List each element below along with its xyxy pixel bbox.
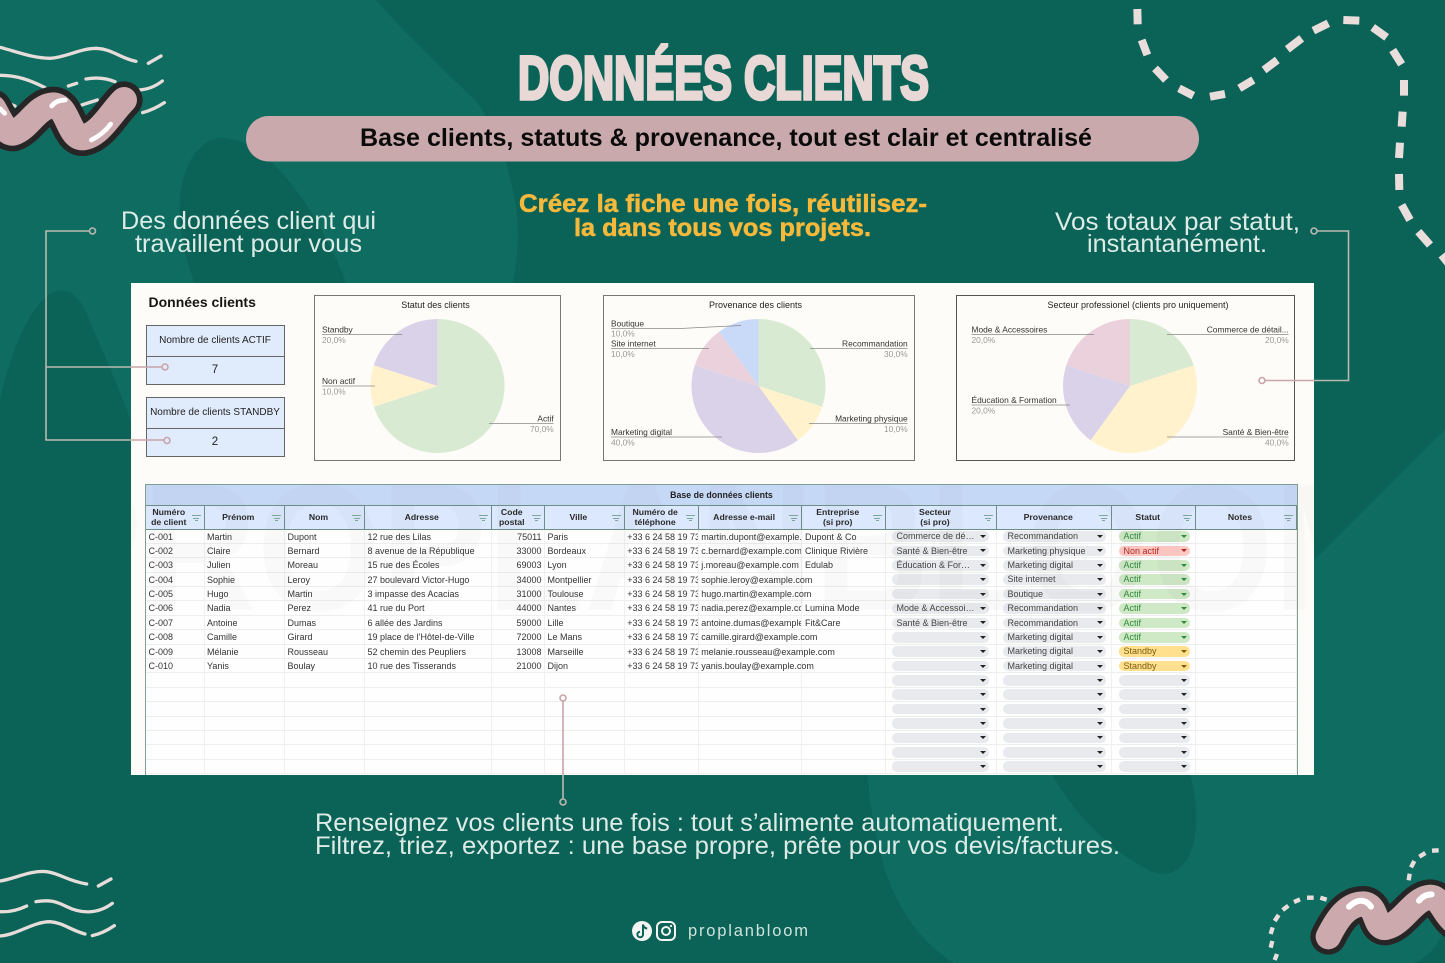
table rows: sophie.leroy@example.com bbox=[701, 575, 812, 585]
table rows: 6 allée des Jardins bbox=[368, 618, 443, 628]
chart: provenance des clients: Boutique bbox=[611, 318, 644, 328]
table rows: 3 impasse des Acacias bbox=[368, 589, 459, 599]
table rows: Marseille bbox=[548, 647, 584, 657]
table header: Secteur bbox=[919, 507, 951, 517]
table rows: Commerce de dé… bbox=[896, 531, 975, 541]
table rows: Bordeaux bbox=[548, 546, 586, 556]
table rows: Marketing digital bbox=[1007, 646, 1073, 656]
table rows: yanis.boulay@example.com bbox=[701, 661, 814, 671]
subtitle banner: Base clients, statuts & provenance, tout est clair et centralisé bbox=[360, 124, 1092, 152]
chart: provenance des clients: 10,0% bbox=[884, 424, 908, 434]
table rows: 12 rue des Lilas bbox=[368, 532, 431, 542]
table header: Code bbox=[501, 507, 523, 517]
table rows: 75011 bbox=[517, 532, 542, 542]
table rows: Martin bbox=[288, 589, 313, 599]
table rows bbox=[146, 530, 1297, 774]
chart: provenance des clients: 10,0% bbox=[611, 349, 635, 359]
table rows: +33 6 24 58 19 73 bbox=[627, 661, 699, 671]
icon: tiktok bbox=[632, 921, 652, 941]
table header: Adresse bbox=[405, 512, 439, 522]
table rows: 8 avenue de la République bbox=[368, 546, 475, 556]
table rows: Marketing digital bbox=[1007, 560, 1073, 570]
table header: Nom bbox=[309, 512, 328, 522]
card: clients actifs bbox=[146, 325, 284, 384]
table header: Entreprise bbox=[816, 507, 859, 517]
chart: secteur professionnel: Commerce de détail... bbox=[1207, 324, 1289, 334]
chart: secteur professionnel: Éducation & Formation bbox=[972, 395, 1057, 405]
table rows: Claire bbox=[207, 546, 231, 556]
table rows: Non actif bbox=[1123, 546, 1159, 556]
table header: Statut bbox=[1135, 512, 1160, 522]
chart: statut des clients: 70,0% bbox=[530, 424, 554, 434]
table header: Numéro de bbox=[632, 507, 678, 517]
chart: secteur professionnel: 40,0% bbox=[1265, 438, 1289, 448]
yellow headline: Créez la fiche une fois, réutilisez- bbox=[519, 190, 927, 218]
table rows: C-004 bbox=[148, 575, 173, 585]
table rows: C-007 bbox=[148, 618, 173, 628]
table rows: 34000 bbox=[516, 575, 542, 585]
table rows: 72000 bbox=[516, 632, 542, 642]
table header: (si pro) bbox=[920, 517, 950, 527]
table rows: Antoine bbox=[207, 618, 238, 628]
table header: (si pro) bbox=[823, 517, 852, 527]
table rows: +33 6 24 58 19 73 bbox=[627, 603, 699, 613]
icon: instagram bbox=[657, 922, 675, 940]
yellow headline: la dans tous vos projets. bbox=[574, 214, 871, 242]
table rows: Dumas bbox=[288, 618, 316, 628]
table rows: Lumina Mode bbox=[805, 603, 860, 613]
table header: de client bbox=[151, 517, 186, 527]
table rows: +33 6 24 58 19 73 bbox=[627, 632, 699, 642]
table rows: Le Mans bbox=[548, 632, 582, 642]
chart: secteur professionnel: Mode & Accessoires bbox=[972, 324, 1047, 334]
table rows: Yanis bbox=[207, 661, 229, 671]
chart: provenance des clients: Marketing physique bbox=[835, 414, 908, 424]
table rows: Nadia bbox=[207, 603, 231, 613]
title: DONNÉES CLIENTS bbox=[518, 44, 929, 112]
table rows: +33 6 24 58 19 73 bbox=[627, 575, 699, 585]
table rows: 31000 bbox=[516, 589, 542, 599]
table rows: Actif bbox=[1123, 632, 1141, 642]
table rows: Mode & Accessoi… bbox=[896, 603, 975, 613]
callout: client data: Des données client qui bbox=[121, 207, 376, 235]
table rows: Santé & Bien-être bbox=[896, 618, 968, 628]
table rows: Recommandation bbox=[1007, 618, 1078, 628]
table rows: Lyon bbox=[548, 560, 567, 570]
table rows: 52 chemin des Peupliers bbox=[368, 647, 466, 657]
table rows: 44000 bbox=[516, 603, 542, 613]
table header: Provenance bbox=[1024, 512, 1073, 522]
table rows: Actif bbox=[1123, 603, 1141, 613]
table rows: C-003 bbox=[148, 560, 173, 570]
table rows: 15 rue des Écoles bbox=[368, 560, 440, 570]
panel: spreadsheet bbox=[131, 283, 1314, 775]
chart: secteur professionnel: 20,0% bbox=[972, 335, 996, 345]
table rows: C-006 bbox=[148, 603, 173, 613]
chart: statut des clients: 20,0% bbox=[322, 335, 346, 345]
table rows: Toulouse bbox=[548, 589, 584, 599]
table rows: Camille bbox=[207, 632, 237, 642]
chart: statut des clients: Actif bbox=[537, 414, 554, 424]
table rows: Marketing digital bbox=[1007, 661, 1073, 671]
chart: provenance des clients: 30,0% bbox=[884, 349, 908, 359]
table rows: C-001 bbox=[148, 532, 173, 542]
table rows: Actif bbox=[1123, 589, 1141, 599]
table rows: Santé & Bien-être bbox=[896, 546, 968, 556]
table header: Numéro bbox=[152, 507, 185, 517]
table rows: Edulab bbox=[805, 560, 833, 570]
card: clients standby bbox=[146, 397, 284, 456]
table rows: 21000 bbox=[516, 661, 542, 671]
table rows: Actif bbox=[1123, 618, 1141, 628]
table rows: C-008 bbox=[148, 632, 173, 642]
table rows: Martin bbox=[207, 532, 232, 542]
bottom text block: Renseignez vos clients une fois : tout s’alimente automatiquement. bbox=[315, 809, 1064, 837]
table title: Base de données clients bbox=[670, 490, 773, 500]
chart: provenance des clients: Provenance des clients bbox=[709, 300, 803, 310]
table: base de données clients bbox=[145, 484, 1298, 784]
chart: statut des clients: Standby bbox=[322, 324, 354, 334]
table rows: Bernard bbox=[288, 546, 320, 556]
table rows: Montpellier bbox=[548, 575, 592, 585]
table rows: Actif bbox=[1123, 531, 1141, 541]
table rows: Dupont bbox=[288, 532, 317, 542]
table rows: Rousseau bbox=[288, 647, 328, 657]
card: clients actifs: Nombre de clients ACTIF bbox=[159, 335, 271, 346]
table rows: +33 6 24 58 19 73 bbox=[627, 560, 699, 570]
table rows: 33000 bbox=[516, 546, 542, 556]
table rows: C-005 bbox=[148, 589, 173, 599]
table rows: Site internet bbox=[1007, 574, 1056, 584]
table rows: Leroy bbox=[288, 575, 310, 585]
table rows: Dijon bbox=[548, 661, 568, 671]
table rows: +33 6 24 58 19 73 bbox=[627, 647, 699, 657]
chart: secteur professionnel: Santé & Bien-être bbox=[1223, 427, 1289, 437]
table rows: Hugo bbox=[207, 589, 229, 599]
table rows: 59000 bbox=[516, 618, 542, 628]
callout: totals by status: instantanément. bbox=[1087, 230, 1267, 258]
table rows: Sophie bbox=[207, 575, 235, 585]
chart: provenance des clients: Marketing digital bbox=[611, 427, 672, 437]
table rows: Clinique Rivière bbox=[805, 546, 868, 556]
table header: Adresse e-mail bbox=[713, 512, 775, 522]
table header bbox=[146, 506, 1297, 530]
table rows: Actif bbox=[1123, 574, 1141, 584]
bottom text block: Filtrez, triez, exportez : une base propre, prête pour vos devis/factures. bbox=[315, 832, 1120, 860]
table header: téléphone bbox=[635, 517, 676, 527]
handle: proplanbloom bbox=[688, 922, 808, 940]
table rows: 10 rue des Tisserands bbox=[368, 661, 456, 671]
table rows: Mélanie bbox=[207, 647, 239, 657]
card: clients standby: Nombre de clients STANDBY bbox=[150, 407, 280, 418]
callout: client data: travaillent pour vous bbox=[135, 230, 362, 258]
table rows: Moreau bbox=[288, 560, 318, 570]
chart: provenance des clients: 10,0% bbox=[611, 328, 635, 338]
table rows: melanie.rousseau@example.com bbox=[701, 647, 835, 657]
table rows: +33 6 24 58 19 73 bbox=[627, 532, 699, 542]
table rows: Nantes bbox=[548, 603, 576, 613]
table header: Notes bbox=[1228, 512, 1252, 522]
heading: données clients: Données clients bbox=[148, 294, 256, 310]
chart: statut des clients: Non actif bbox=[322, 376, 356, 386]
card: clients standby: 2 bbox=[212, 436, 218, 448]
chart: statut des clients: 10,0% bbox=[322, 386, 346, 396]
card: clients actifs: 7 bbox=[212, 364, 218, 376]
table title bbox=[146, 484, 1297, 506]
table rows: 27 boulevard Victor-Hugo bbox=[368, 575, 469, 585]
table rows: j.moreau@example.com bbox=[701, 560, 799, 570]
chart: provenance des clients: Recommandation bbox=[842, 338, 908, 348]
table rows: Recommandation bbox=[1007, 603, 1078, 613]
table rows: hugo.martin@example.com bbox=[701, 589, 811, 599]
table rows: C-002 bbox=[148, 546, 173, 556]
chart: secteur professionnel: 20,0% bbox=[1265, 335, 1289, 345]
table rows: Girard bbox=[288, 632, 313, 642]
table rows: C-010 bbox=[148, 661, 173, 671]
table rows: Paris bbox=[548, 532, 568, 542]
table rows: Lille bbox=[548, 618, 564, 628]
table rows: Recommandation bbox=[1007, 531, 1078, 541]
table rows: Fit&Care bbox=[805, 618, 840, 628]
table rows: +33 6 24 58 19 73 bbox=[627, 546, 699, 556]
table rows: 19 place de l’Hôtel-de-Ville bbox=[368, 632, 474, 642]
chart: provenance des clients: Site internet bbox=[611, 338, 656, 348]
table rows: Éducation & For… bbox=[896, 560, 970, 570]
chart: provenance des clients: 40,0% bbox=[611, 438, 635, 448]
table rows: c.bernard@example.com bbox=[701, 546, 802, 556]
table rows: +33 6 24 58 19 73 bbox=[627, 618, 699, 628]
table rows: Perez bbox=[288, 603, 311, 613]
table rows: Dupont & Co bbox=[805, 532, 857, 542]
table rows: Boutique bbox=[1007, 589, 1043, 599]
table rows: Boulay bbox=[288, 661, 315, 671]
table rows: C-009 bbox=[148, 647, 173, 657]
table rows: Julien bbox=[207, 560, 231, 570]
table header: Ville bbox=[569, 512, 587, 522]
table rows: +33 6 24 58 19 73 bbox=[627, 589, 699, 599]
table rows: 41 rue du Port bbox=[368, 603, 425, 613]
table rows: 13008 bbox=[516, 647, 542, 657]
table rows: camille.girard@example.com bbox=[701, 632, 817, 642]
table rows: Standby bbox=[1123, 646, 1157, 656]
table header: postal bbox=[499, 517, 525, 527]
table rows: Standby bbox=[1123, 661, 1157, 671]
chart: secteur professionnel: Secteur professionel (clients pro uniquement) bbox=[1047, 300, 1229, 310]
table rows: 69003 bbox=[516, 560, 542, 570]
table rows: Actif bbox=[1123, 560, 1141, 570]
table rows: Marketing physique bbox=[1007, 546, 1086, 556]
chart: secteur professionnel: 20,0% bbox=[972, 406, 996, 416]
table rows: Marketing digital bbox=[1007, 632, 1073, 642]
table header: Prénom bbox=[222, 512, 254, 522]
chart: statut des clients: Statut des clients bbox=[401, 300, 470, 310]
callout: totals by status: Vos totaux par statut, bbox=[1055, 208, 1300, 236]
